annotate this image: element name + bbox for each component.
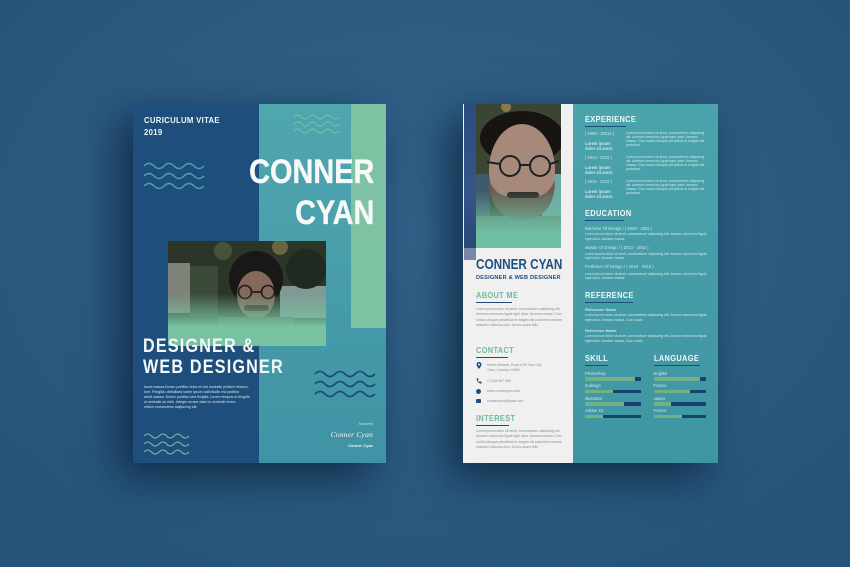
photo: portrait close-up [476,104,561,248]
section: reference: Lorem ipsum dolor sit amet, consectetuer adipiscing elit. Aenean commodo ligula [585,313,707,317]
section: experience: massa. Cum sociis natoque penatibus et magnis dis [626,162,704,166]
role subheading: DESIGNER & WEB DESIGNER [476,275,561,281]
text: Lorem ipsum dolor sit amet, consectetuer adipiscing elit. [476,428,560,432]
section: education: eget dolor. Aenean massa. [585,276,625,280]
icon: waves bottom right [314,370,376,398]
signature block: Sincerely [359,422,373,426]
green column [350,104,386,328]
text block: intro: rettum consectetur adipiscing elit. [144,405,197,409]
section: experience [585,114,704,199]
section: language [654,353,706,418]
title: name [249,153,374,232]
entry 3: ( 2016 - 2018 ) [585,179,612,184]
section: experience: elit. Aenean commodo ligula eget dolor. Aenean [626,182,698,186]
skill bar: Indesign: Indesign [585,383,601,388]
label: curriculum vitae: 2019 [144,126,162,136]
icon: waves bottom left [144,434,190,454]
heading: CONTACT [476,345,514,355]
text block: intro [144,384,250,409]
text: Aenean commodo ligula eget dolor. Aenean massa. Cum [476,434,562,438]
skill bar: Illustrator: Illustrator [585,396,602,400]
entry 1: Bachelor Of Design / ( 2009 - 2052 ) [585,226,652,230]
entry 2: ( 2013 - 2015 ) [585,155,612,160]
section: contact [476,345,542,403]
heading: EDUCATION [585,208,632,218]
panel: back page [463,104,718,463]
text block: intro: Amet massa Donec porttitor dolor et nisl molestie pretium feliscur- [144,384,249,388]
section: about me [476,290,563,327]
heading: SKILL [585,353,608,363]
text: mail: connercyan@gmail.com [487,398,523,402]
section: reference: eget dolor. Aenean massa. Cum sociis [585,318,643,322]
label: curriculum vitae: CURICULUM VITAE [144,114,220,124]
section: experience: Lorem ipsum dolor sit amet, consectetuer adipiscing [626,154,704,158]
text: nascetur ridiculus mus. Donec quam felis. [476,445,539,449]
label: curriculum vitae [144,114,220,136]
text: sociis natoque penatibus et magnis dis parturient montes, [476,440,563,444]
section: experience: dolor sit amet. [585,146,613,151]
text block: intro: ut molestie ac nibh. Integer ornare diam in molestie lorem [144,400,236,404]
section: experience: dolor sit amet. [585,194,613,199]
section: education: Lorem ipsum dolor sit amet, consectetuer adipiscing elit. Aenean commodo ligula [585,272,707,276]
section: experience: Lorem ipsum [585,140,611,146]
section: experience: Lorem ipsum [585,188,611,194]
icon: mail [476,399,481,403]
entry 1: ( 2009 - 20012 ) [585,131,614,136]
heading: LANGUAGE [654,353,699,363]
skill bar: PhotoShop: PhotoShop [585,370,606,376]
section: experience: massa. Cum sociis natoque penatibus et magnis dis [626,186,704,190]
text: Aenean commodo ligula eget dolor. Aenean massa. Cum [476,312,562,316]
skill bar: Adobe Xd: Adobe Xd [585,408,603,413]
entry 2: Reference Name [585,328,616,332]
text: address [487,362,542,372]
section: interest [476,413,563,449]
signature block: Conner Cyan [348,443,373,448]
panel: front page [133,104,386,463]
text: phone: + 1234 567 889 [487,378,511,382]
title: name: CONNER [249,153,374,191]
accent square [464,248,476,260]
entry 2: Master Of Design / ( 2013 - 2015 ) [585,244,649,250]
icon: waves left [144,162,204,190]
section: education [585,208,707,280]
name heading: CONNER CYAN [476,257,562,273]
section: experience: elit. Aenean commodo ligula eget dolor. Aenean [626,158,698,162]
text block: intro: amet massa. Donec porttitor sed fringilla. Lorem tempus ut fringilla [144,395,250,399]
text [476,428,563,449]
text [476,306,563,327]
section: experience: dolor sit amet. [585,170,613,175]
heading: role: WEB DESIGNER [143,356,284,378]
language bar: France: France [654,408,667,413]
section: education: Lorem ipsum dolor sit amet, consectetuer adipiscing elit. Aenean commodo ligula [585,232,707,236]
section: experience: parturient. [626,190,641,194]
section: reference [585,290,707,343]
language bar: Japan: Japan [654,396,665,400]
entry 1: Reference Name [585,306,616,312]
heading: INTEREST [476,413,515,423]
section: experience: parturient. [626,166,641,170]
icon: phone [476,378,482,384]
section: experience: Lorem ipsum dolor sit amet, consectetuer adipiscing [626,130,704,134]
text: Lorem ipsum dolor sit amet, consectetuer adipiscing elit. [476,306,560,310]
signature block [331,422,373,448]
text: nascetur ridiculus mus. Donec quam felis. [476,323,539,327]
section: experience: massa. Cum sociis natoque penatibus et magnis dis [626,138,704,142]
section: experience: parturient. [626,142,641,146]
photo: portrait with foliage [168,241,326,346]
icon: location pin [476,362,482,369]
icon: waves top right [294,114,340,134]
heading: role [143,336,284,378]
panel: back page: eget dolor. Aenean massa. Cum sociis [585,338,643,342]
text: address: Home Address, Road # 60 Your City [487,362,541,366]
section: experience: Lorem ipsum dolor sit amet, consectetuer adipiscing [626,178,704,182]
language bar: English: English [654,370,667,376]
section: education: eget dolor. Aenean massa. [585,236,625,240]
section: skill [585,353,641,418]
text: sociis natoque penatibus et magnis dis parturient montes, [476,318,563,322]
text block: intro: lore. Fringilla, dellsillaes lorem ipsum sollicitudin est porttitor [144,390,239,394]
heading: role: DESIGNER & [143,336,255,357]
heading: ABOUT ME [476,290,518,300]
language bar: France: France [654,383,667,388]
left accent band [464,104,476,248]
section: reference: Lorem ipsum dolor sit amet, consectetuer adipiscing elit. Aenean commodo ligula [585,334,707,338]
heading: REFERENCE [585,290,634,300]
icon: web [476,388,481,394]
section: experience: Lorem ipsum [585,164,611,170]
text: web: www.connercyan.com [487,388,520,392]
teal column [573,104,718,463]
text: address: Town, Country # 5566 [487,368,520,372]
section: experience: elit. Aenean commodo ligula eget dolor. Aenean [626,134,698,138]
section: education: Lorem ipsum dolor sit amet, consectetuer adipiscing elit. Aenean commodo ligula [585,252,707,256]
entry 3: Professor Of Design / ( 2016 - 2018 ) [585,264,654,268]
signature block: Conner Cyan [331,430,373,439]
heading: EXPERIENCE [585,114,636,124]
teal column [259,104,386,463]
section: education: eget dolor. Aenean massa. [585,256,625,260]
title: name: CYAN [295,194,374,232]
